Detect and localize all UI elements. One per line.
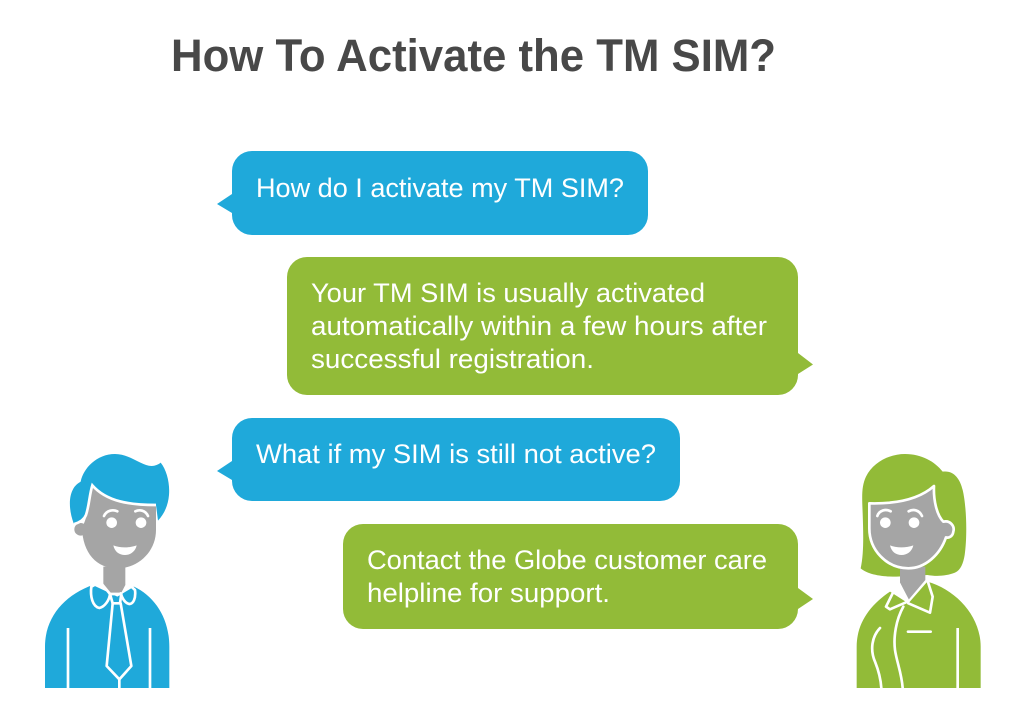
speech bubble: first answer: automatically within a few hours after <box>311 311 767 341</box>
woman: hair <box>861 454 966 577</box>
man: smile <box>113 545 137 555</box>
icon: man in blue shirt and tie <box>45 454 169 688</box>
speech bubble: first question: How do I activate my TM SIM? <box>256 173 624 203</box>
speech bubble: second question: What if my SIM is still not active? <box>256 439 656 469</box>
man: eyes and brows <box>104 510 148 528</box>
speech bubble: first answer: Your TM SIM is usually activated <box>311 278 705 308</box>
man: ear <box>74 523 87 536</box>
woman: blouse <box>857 582 981 688</box>
woman: neck <box>900 567 925 600</box>
speech bubble: second answer: helpline for support. <box>367 578 610 608</box>
woman: smile <box>890 545 913 555</box>
woman: collar and blouse lines <box>872 580 958 688</box>
woman: eyes and brows <box>877 510 922 528</box>
icon: woman in green blouse <box>857 454 981 688</box>
man: neck <box>103 567 125 594</box>
speech bubble: second answer <box>343 524 813 629</box>
speech bubble: second answer: Contact the Globe customer care <box>367 545 767 575</box>
man: shirt <box>45 585 169 688</box>
speech bubble: first answer <box>287 257 813 395</box>
speech bubble: first question <box>217 151 648 235</box>
man: face <box>82 487 156 568</box>
man: collar, tie and shirt lines <box>68 582 150 688</box>
speech bubble: first answer: successful registration. <box>311 344 594 374</box>
title: How To Activate the TM SIM? <box>171 30 776 81</box>
man: hair <box>70 454 169 523</box>
speech bubble: second question <box>217 418 680 501</box>
woman: face and ear <box>869 486 954 568</box>
